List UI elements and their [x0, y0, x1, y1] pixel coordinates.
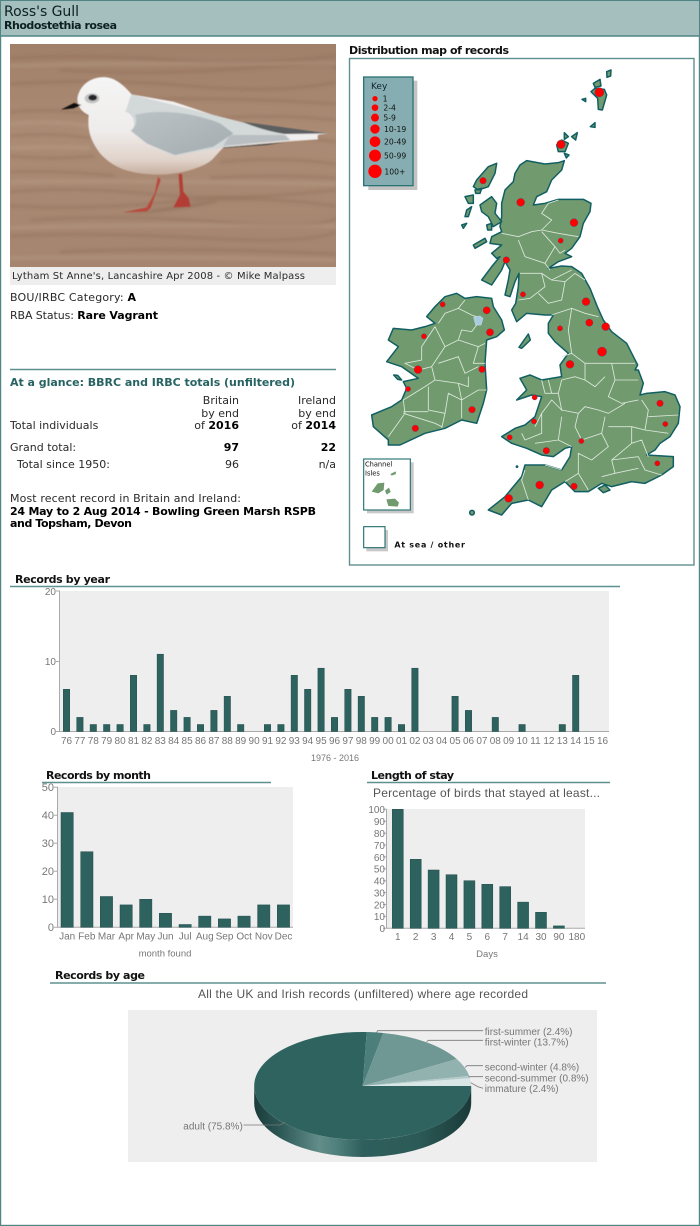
photo caption: Lytham St Anne's, Lancashire Apr 2008 - © Mike Malpass [12, 271, 305, 282]
bar chart: records by year: 87 [208, 736, 220, 747]
bar chart: length of stay: 5 [467, 932, 473, 943]
bar chart: records by month: 10 [42, 894, 54, 906]
pie labels: first-summer (2.4%) [485, 1027, 572, 1038]
column header: Ireland: by end [298, 407, 336, 420]
status line: RBA Status: Rare Vagrant [10, 309, 158, 322]
bird [61, 77, 328, 214]
at sea box [364, 527, 465, 551]
Orkney and Shetland [557, 70, 611, 158]
bar chart: records by year: 04 [436, 736, 448, 747]
bar chart: records by year: 07 [476, 736, 488, 747]
row: total since 1950 [16, 458, 336, 471]
row: grand total: 97 [224, 441, 239, 454]
bar chart: records by month: 0 [48, 922, 54, 934]
map key: 20-49 [384, 138, 406, 147]
map key [364, 77, 417, 190]
bar chart: records by month: 30 [42, 838, 54, 850]
bar chart: length of stay: 40 [374, 876, 385, 888]
bar chart: records by year: 78 [88, 736, 99, 747]
header bar [0, 1, 700, 36]
row: grand total [10, 441, 336, 454]
bar chart: length of stay: 2 [413, 932, 419, 943]
bar chart: records by year: 88 [222, 736, 233, 747]
bar chart: records by month: 20 [42, 866, 54, 878]
bar chart: length of stay: 1 [395, 932, 401, 943]
bar chart: length of stay: 180 [568, 932, 586, 943]
bar chart: records by year: 0 [50, 727, 56, 738]
row: grand total: 22 [321, 441, 336, 454]
bar chart: records by year: 10 [45, 657, 56, 668]
row: total individuals: Total individuals [9, 419, 99, 432]
bar chart: records by year: 93 [289, 736, 300, 747]
bar chart: records by year: 16 [597, 736, 608, 747]
bar chart: records by month [42, 782, 293, 960]
row: total since 1950: n/a [319, 458, 336, 471]
Irish Sea and southern islands [394, 334, 610, 493]
bar chart: records by month: 40 [42, 810, 54, 822]
bar chart: records by month: Dec [275, 932, 292, 942]
bar chart: records by year: 96 [329, 736, 340, 747]
Scottish islands [462, 163, 502, 248]
map key: 50-99 [384, 152, 406, 161]
column header: Ireland: Ireland [298, 394, 336, 407]
bar chart: records by year: 89 [235, 736, 247, 747]
bar chart: records by month: month found [139, 948, 191, 960]
Channel Isles inset [364, 459, 414, 513]
map key: 10-19 [384, 125, 406, 134]
map key: 5-9 [383, 114, 396, 123]
bar chart: records by month: 50 [42, 782, 54, 794]
bar chart: length of stay: 30 [374, 888, 385, 900]
bar chart: records by month: Aug [196, 932, 214, 942]
bar chart: records by month: Nov [255, 932, 273, 942]
bar chart: records by year: 85 [182, 736, 193, 747]
bar chart: records by year: 08 [490, 736, 501, 747]
title: Ross's Gull [4, 4, 79, 20]
map heading: Distribution map of records [349, 44, 509, 57]
bar chart: length of stay: 100 [368, 805, 385, 816]
bar chart: length of stay: 0 [379, 924, 385, 935]
bar chart: length of stay: 50 [374, 864, 385, 876]
map key: 1 [383, 95, 388, 104]
bar chart: records by month: Apr [118, 932, 135, 942]
bar chart: records by month: Mar [98, 932, 116, 942]
bar chart: records by month: Jul [179, 932, 192, 942]
bar chart: records by month: Sep [216, 932, 234, 942]
most recent record: Most recent record in Britain and Ireland: [10, 492, 241, 505]
bar chart: records by month: May [136, 932, 155, 942]
bar chart: records by year: 09 [503, 736, 515, 747]
age chart subtitle: All the UK and Irish records (unfiltered) where age recorded [198, 987, 528, 1001]
slice: first-summer [363, 1032, 383, 1086]
at sea box: At sea / other [394, 540, 465, 549]
category line: BOU/IRBC Category: A [10, 291, 136, 304]
bar chart: records by year: 05 [450, 736, 461, 747]
bar chart: length of stay: 70 [374, 841, 385, 852]
bar chart: records by year: 94 [302, 736, 314, 747]
bar chart: length of stay: 6 [485, 932, 491, 943]
pie side wall [254, 1086, 471, 1157]
map key: 100+ [384, 167, 405, 176]
bar chart: length of stay: 3 [431, 932, 437, 943]
bar chart: length of stay: 20 [374, 900, 385, 912]
length of stay subtitle: Percentage of birds that stayed at least... [373, 786, 600, 800]
most recent record: and Topsham, Devon [10, 517, 132, 530]
bar chart: records by year: 92 [275, 736, 287, 747]
bar chart: records by year: 77 [74, 736, 86, 747]
bar chart: records by year: 84 [168, 736, 180, 747]
photo: Ross's Gull on sand [10, 44, 338, 267]
pie labels: second-summer (0.8%) [485, 1074, 589, 1085]
slice: second-winter [363, 1059, 469, 1086]
pie labels [183, 1027, 589, 1132]
row: total since 1950: 96 [225, 458, 239, 471]
bar chart: records by year: 11 [530, 736, 541, 747]
bar chart: records by year [45, 587, 609, 763]
map key: 2-4 [383, 104, 396, 113]
bar chart: length of stay: 14 [518, 932, 529, 943]
bar chart: records by year: 13 [557, 736, 568, 747]
column header: Britain: Britain [203, 394, 239, 407]
bar chart: records by year: 00 [383, 736, 394, 747]
photo caption [10, 267, 336, 285]
bar chart: records by year: 79 [101, 736, 113, 747]
column header: Britain: by end [201, 407, 239, 420]
row: grand total: Grand total: [10, 441, 76, 454]
pie labels: immature (2.4%) [485, 1084, 559, 1095]
records by year heading: Records by year [15, 573, 111, 586]
column header: Ireland: of 2014 [291, 419, 336, 432]
bar chart: records by year: 80 [115, 736, 126, 747]
bar chart: length of stay: 90 [374, 817, 385, 828]
scientific name: Rhodostethia rosea [4, 19, 117, 32]
bar chart: records by year: 81 [128, 736, 139, 747]
bar chart: records by year: 76 [61, 736, 72, 747]
bar chart: length of stay: 30 [535, 932, 547, 943]
bar chart: length of stay: 90 [553, 932, 565, 943]
records by age heading: Records by age [55, 969, 145, 982]
Channel Isles inset: Channel [365, 460, 392, 468]
land masses [372, 70, 680, 515]
bar chart: length of stay: 80 [374, 829, 385, 840]
bar chart: length of stay: 4 [449, 932, 455, 943]
bar chart: records by year: 95 [316, 736, 327, 747]
bar chart: records by year: 82 [141, 736, 153, 747]
bar chart: records by month: Feb [78, 932, 96, 942]
bar chart: length of stay [368, 805, 586, 960]
bar chart: records by month: Jan [59, 932, 75, 942]
bar chart: records by year: 15 [584, 736, 595, 747]
most recent record: 24 May to 2 Aug 2014 - Bowling Green Marsh RSPB [10, 505, 316, 518]
bar chart: records by year: 97 [342, 736, 354, 747]
bar chart: records by year: 86 [195, 736, 206, 747]
bar chart: records by year: 02 [409, 736, 421, 747]
bar chart: records by year: 12 [543, 736, 555, 747]
slice: second-summer [363, 1076, 470, 1086]
bar chart: records by year: 06 [463, 736, 474, 747]
bar chart: records by year: 99 [369, 736, 381, 747]
records by month heading: Records by month [46, 769, 151, 782]
Lough Neagh [474, 316, 483, 325]
row: total since 1950: Total since 1950: [16, 458, 110, 471]
bar chart: records by year: 90 [249, 736, 260, 747]
bar chart: records by year: 98 [356, 736, 367, 747]
Great Britain [482, 161, 680, 515]
bar chart: records by year: 01 [396, 736, 407, 747]
county boundaries [388, 200, 678, 500]
bar chart: records by year: 10 [517, 736, 528, 747]
pie chart: records by age [128, 1010, 597, 1162]
bar chart: records by month: Jun [157, 932, 174, 942]
pie labels: second-winter (4.8%) [485, 1063, 579, 1074]
map key: Key [371, 82, 388, 92]
bar chart: records by year: 91 [262, 736, 273, 747]
bar chart: records by year: 03 [423, 736, 434, 747]
length of stay heading: Length of stay [371, 769, 454, 782]
slice: first-winter [363, 1033, 457, 1086]
slice: adult [254, 1032, 471, 1140]
bar chart: length of stay: 10 [374, 912, 385, 923]
most recent record [10, 492, 316, 530]
Ireland [372, 293, 504, 445]
slice: immature [363, 1078, 471, 1086]
pie labels: adult (75.8%) [183, 1122, 243, 1132]
Channel Isles inset: Isles [365, 469, 380, 477]
bar chart: length of stay: Days [476, 949, 498, 960]
bar chart: length of stay: 60 [374, 853, 385, 864]
panel: distribution map [350, 58, 694, 565]
bar chart: records by month: Oct [236, 932, 252, 942]
at a glance heading: At a glance: BBRC and IRBC totals (unfiltered) [10, 376, 295, 389]
bar chart: length of stay: 7 [502, 932, 508, 943]
bar chart: records by year: 20 [45, 587, 56, 598]
at a glance panel [9, 370, 336, 471]
bar chart: records by year: 1976 - 2016 [311, 753, 359, 763]
bar chart: records by year: 14 [570, 736, 582, 747]
pie labels: first-winter (13.7%) [485, 1038, 569, 1048]
bar chart: records by year: 83 [155, 736, 166, 747]
column header: Britain: of 2016 [194, 419, 239, 432]
record dots [405, 88, 668, 502]
